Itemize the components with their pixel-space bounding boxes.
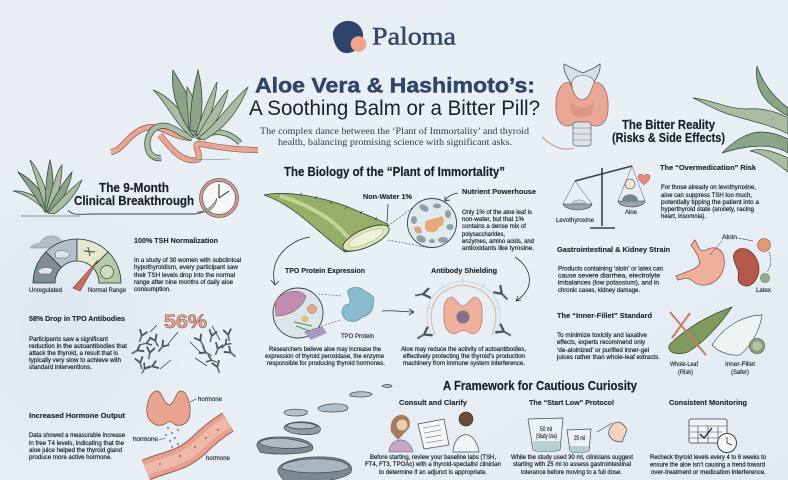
text: shielding description: Aloe may reduce the activity of autoantibodies, bbox=[401, 346, 526, 353]
panel: biology of the plant of immortality bbox=[264, 165, 536, 367]
panel: 9-month clinical breakthrough bbox=[13, 160, 241, 470]
column: consult and clarify bbox=[365, 398, 501, 476]
column: start low protocol: starting with 25 ml to assess gastrointestinal bbox=[513, 461, 631, 468]
illustration: whole leaf vs inner fillet bbox=[669, 307, 764, 376]
illustration: stomach and kidney bbox=[676, 234, 772, 294]
illustration: measuring cups and hand bbox=[528, 418, 627, 452]
text: GI and kidney strain: Gastrointestinal & Kidney Strain bbox=[557, 245, 670, 254]
text: nutrient powerhouse: polysaccharides, bbox=[462, 231, 505, 238]
text: shielding description: machinery from immune system interference. bbox=[403, 360, 525, 367]
text: TPO description: responsible for producing thyroid hormones. bbox=[267, 360, 385, 367]
text: GI and kidney strain: chronic cases, kidney damage. bbox=[558, 287, 640, 294]
text: nutrient powerhouse: Only 1% of the aloe leaf is bbox=[462, 209, 533, 216]
icon: nutrient microscope view bbox=[408, 198, 456, 248]
column: consult and clarify: FT4, FT3, TPOAc) with a thyroid-specialist clinician bbox=[365, 461, 501, 468]
stat: TPO antibodies: typically very slow to achieve with bbox=[29, 357, 121, 364]
text: inner-fillet standard: ‘de-aloinized’ or purified inner-gel bbox=[557, 347, 649, 354]
arrow: nutrients to shielding bbox=[515, 257, 529, 301]
stat: TSH normalization: their TSH levels drop into the normal bbox=[134, 272, 235, 279]
tagline bbox=[260, 126, 529, 148]
text: nutrient powerhouse: non-water, but that 1% bbox=[462, 216, 524, 223]
heading: bitter reality: (Risks & Side Effects) bbox=[612, 131, 725, 145]
icon: aloe plant bbox=[13, 160, 82, 216]
stat: TPO antibodies: standard interventions. bbox=[29, 364, 92, 371]
illustration: whole leaf vs inner fillet: (Risk) bbox=[678, 369, 693, 376]
icon: calendar and clock bbox=[689, 419, 736, 452]
heading: biology: The Biology of the “Plant of Immortality” bbox=[284, 165, 505, 179]
stat: hormone output: Increased Hormone Output bbox=[29, 411, 125, 420]
text: GI and kidney strain: cause severe diarrhea, electrolyte bbox=[558, 272, 660, 280]
heading: bitter reality: The Bitter Reality bbox=[622, 118, 715, 132]
tagline: health, balancing promising science with significant asks. bbox=[278, 137, 512, 148]
text: overmedication risk: The “Overmedication” Risk bbox=[660, 163, 757, 172]
column: consistent monitoring: Consistent Monitoring bbox=[669, 398, 747, 407]
icon: TPO protein bbox=[341, 287, 375, 340]
illustration: measuring cups and hand: (Study Use) bbox=[536, 433, 557, 440]
text: nutrient powerhouse: antioxidants like tyrosine. bbox=[462, 245, 534, 252]
illustration: whole leaf vs inner fillet: Inner-Fillet bbox=[725, 361, 755, 368]
arrow: leaf to TPO bbox=[271, 237, 310, 285]
text: GI and kidney strain bbox=[557, 245, 670, 294]
stat: TSH normalization: consumption. bbox=[134, 286, 171, 293]
panel: the bitter reality bbox=[556, 118, 772, 376]
illustration: balance scale: Aloe bbox=[625, 209, 638, 216]
text: TPO description bbox=[265, 346, 385, 367]
column: start low protocol: The “Start Low” Protocol bbox=[529, 398, 614, 407]
heading: TPO protein expression: TPO Protein Expression bbox=[285, 266, 365, 275]
column: consistent monitoring: Recheck thyroid levels every 4 to 6 weeks to bbox=[650, 454, 766, 461]
column: consistent monitoring bbox=[650, 398, 766, 476]
column: start low protocol bbox=[511, 398, 633, 476]
stat: TSH normalization: In a study of 30 women with subclinical bbox=[134, 257, 241, 264]
arrow: protein to thyroid bbox=[382, 309, 414, 315]
illustration: stomach and kidney: Aloin bbox=[722, 234, 738, 241]
heading: framework: A Framework for Cautious Curiosity bbox=[443, 379, 637, 393]
illustration: stepping stones bbox=[257, 384, 392, 480]
stat: hormone output bbox=[29, 411, 125, 461]
stat: hormone output: produce more active hormone. bbox=[29, 454, 112, 461]
illustration: balance scale: Levothyroxine bbox=[556, 217, 595, 224]
stat: TPO antibodies: reduction in the autoantibodies that bbox=[29, 343, 127, 350]
stat: TPO antibodies: 58% Drop in TPO Antibodies bbox=[29, 314, 125, 323]
text: GI and kidney strain: Products containing ‘aloin’ or latex can bbox=[558, 266, 663, 272]
column: consult and clarify: to determine if an adjunct is appropriate. bbox=[379, 469, 487, 476]
illustration: whole leaf vs inner fillet: Whole-Leaf bbox=[670, 361, 698, 368]
icon: TPO protein: TPO Protein bbox=[341, 333, 375, 340]
panel: framework for cautious curiosity bbox=[257, 379, 766, 480]
column: consult and clarify: Consult and Clarify bbox=[399, 398, 468, 407]
stat: TSH normalization bbox=[134, 236, 241, 293]
arrow bbox=[445, 193, 458, 201]
stat: TPO antibodies: attack the thyroid, a result that is bbox=[29, 350, 119, 357]
column: consistent monitoring: over-treatment or medication interference. bbox=[651, 469, 766, 476]
text: GI and kidney strain: imbalances (low potassium), and in bbox=[558, 280, 659, 286]
text: shielding description: effectively protecting the thyroid’s production bbox=[403, 353, 525, 360]
heading: 9-month bbox=[74, 181, 194, 208]
text: nutrient powerhouse: contains a dense mix of bbox=[462, 223, 526, 230]
stat: TPO antibodies bbox=[29, 314, 127, 371]
stat: hormone output: Data showed a measurable increase bbox=[29, 432, 125, 439]
heading: antibody shielding: Antibody Shielding bbox=[431, 266, 497, 275]
illustration: whole leaf vs inner fillet: (Safer) bbox=[731, 369, 749, 376]
illustration: patient and doctor bbox=[389, 412, 479, 452]
text: overmedication risk bbox=[660, 163, 759, 220]
text: shielding description bbox=[401, 346, 526, 367]
text: TPO description: expression of thyroid peroxidase, the enzyme bbox=[265, 353, 384, 360]
chart label: 56 percent: 56% bbox=[164, 312, 207, 333]
text: TPO description: Researchers believe aloe may increase the bbox=[269, 346, 381, 353]
column: consistent monitoring: ensure the aloe isn’t causing a trend toward bbox=[650, 462, 765, 468]
text: nutrient powerhouse: enzymes, amino acids, and bbox=[462, 238, 534, 245]
text: overmedication risk: For those already on levothyroxine, bbox=[661, 184, 756, 191]
column: start low protocol: While the study used 30 ml, clinicians suggest bbox=[511, 454, 633, 461]
illustration: thyroid and blood vessel: hormone bbox=[133, 436, 159, 443]
decorative leaf swoosh bbox=[68, 200, 218, 214]
icon: antibody clusters bbox=[130, 325, 238, 375]
label: non-water: Non-Water 1% bbox=[363, 192, 412, 201]
stat: TSH normalization: 100% TSH Normalization bbox=[134, 236, 218, 245]
title: Aloe Vera & Hashimoto’s: bbox=[255, 74, 535, 98]
illustration: cell bbox=[273, 288, 342, 340]
icon: clock bbox=[197, 178, 238, 218]
illustration: aloe leaf cross-section bbox=[264, 193, 392, 256]
text: overmedication risk: aloe can suppress TSH too much, bbox=[661, 192, 752, 199]
tagline: The complex dance between the ‘Plant of Immortality’ and thyroid bbox=[260, 126, 529, 137]
gauge: TSH range: Unregulated bbox=[29, 287, 63, 294]
illustration: shielded thyroid with antibodies bbox=[414, 277, 513, 343]
cloud bbox=[30, 236, 66, 248]
text: nutrient powerhouse bbox=[462, 187, 536, 252]
stat: TSH normalization: range after nine months of daily aloe bbox=[134, 279, 233, 286]
text: overmedication risk: potentially tipping the patient into a bbox=[661, 199, 759, 206]
connector lines bbox=[388, 208, 430, 248]
illustration: aloe leaves top right bbox=[693, 66, 788, 172]
text: inner-fillet standard: effects, experts recommend only bbox=[557, 339, 646, 346]
gauge: TSH range bbox=[29, 236, 127, 294]
illustration: aloe plant with roots bbox=[111, 70, 258, 160]
gauge: TSH range: Normal Range bbox=[88, 287, 127, 294]
text: inner-fillet standard: juices rather than whole-leaf extracts. bbox=[556, 354, 660, 361]
title bbox=[249, 74, 540, 120]
stat: TPO antibodies: Participants saw a significant bbox=[29, 336, 108, 343]
stat: hormone output: aloe juice helped the thyroid gland bbox=[29, 447, 122, 454]
heading: 9-month: The 9-Month bbox=[99, 181, 169, 195]
logo: Paloma bbox=[333, 21, 456, 53]
text: nutrient powerhouse: Nutrient Powerhouse bbox=[462, 187, 536, 196]
illustration: balance scale bbox=[556, 166, 650, 228]
text: inner-fillet standard bbox=[556, 311, 660, 361]
logo: Paloma: Paloma bbox=[372, 24, 456, 50]
stat: TSH normalization: hypothyroidism, every participant saw bbox=[134, 264, 238, 271]
column: start low protocol: tolerance before moving to a full dose. bbox=[521, 469, 622, 476]
text: inner-fillet standard: The “Inner-Fillet” Standard bbox=[557, 311, 652, 320]
illustration: stomach and kidney: Latex bbox=[756, 287, 772, 294]
stat: hormone output: in free T4 levels, indicating that the bbox=[29, 440, 124, 447]
text: overmedication risk: hyperthyroid state (anxiety, racing bbox=[661, 206, 754, 213]
illustration: thyroid and trachea bbox=[542, 64, 608, 149]
heading: bitter reality bbox=[612, 118, 725, 145]
illustration: thyroid and blood vessel: hormone bbox=[206, 455, 231, 462]
illustration: measuring cups and hand: 50 ml bbox=[540, 426, 552, 433]
text: overmedication risk: heart, insomnia). bbox=[661, 213, 706, 220]
illustration: thyroid and blood vessel: hormone bbox=[198, 396, 223, 403]
illustration: thyroid and blood vessel bbox=[133, 391, 231, 470]
text: inner-fillet standard: To minimize toxicity and laxative bbox=[557, 332, 647, 339]
illustration: measuring cups and hand: 25 ml bbox=[574, 435, 585, 442]
heading: 9-month: Clinical Breakthrough bbox=[74, 194, 194, 208]
column: consult and clarify: Before starting, review your baseline labs (TSH, bbox=[370, 454, 496, 461]
title: A Soothing Balm or a Bitter Pill? bbox=[249, 97, 540, 120]
